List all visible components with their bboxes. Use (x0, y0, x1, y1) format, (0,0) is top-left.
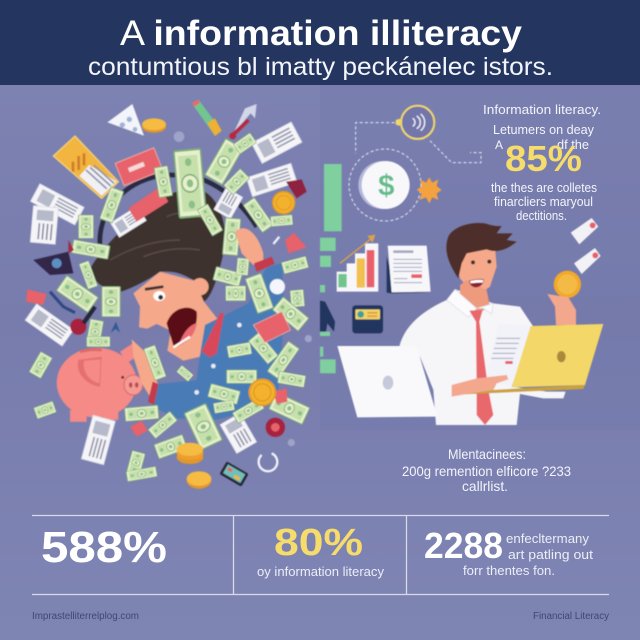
icon: signal ring (396, 106, 434, 139)
icon: orange star (417, 177, 442, 203)
paper in hand (487, 324, 531, 387)
text block: information literacy callout: finarcliers maryoul (494, 194, 593, 209)
title: A information illiteracy (120, 14, 523, 53)
stat: 2288: art patling out (508, 547, 593, 562)
icon: arrow tool (229, 104, 257, 139)
document: orange chart ticket (53, 136, 118, 198)
icon: dollar coin (349, 149, 421, 221)
text block: information literacy callout: 85% (505, 138, 582, 179)
icon: party hat top (107, 104, 144, 136)
header band (0, 0, 640, 85)
stat: 80%: 80% (274, 522, 363, 564)
hand with coin (547, 294, 576, 325)
face (133, 272, 218, 361)
stat: 588%: 588% (41, 523, 167, 572)
footer source: Imprastelliterrelplog.com (32, 611, 139, 622)
stat: 80%: oy information literacy (257, 564, 384, 579)
collar (447, 289, 493, 317)
black ring behind head (100, 175, 257, 247)
footer label: Financial Literacy (533, 611, 609, 622)
text block: maintenance note: callrlist. (462, 478, 508, 494)
text block: information literacy callout (483, 102, 601, 223)
shirt and arms (150, 263, 283, 420)
text block: information literacy callout: Information literacy. (483, 102, 601, 117)
text block: maintenance note: 200g remention elficore ?233 (402, 463, 571, 479)
coins (177, 192, 295, 489)
text block: maintenance note (402, 446, 571, 494)
panel: left illustration, overwhelmed man (25, 99, 312, 489)
typing hand (452, 375, 508, 397)
stat: 80% (257, 522, 384, 579)
text block: information literacy callout: the thes are colletes (491, 180, 597, 195)
stats frame (32, 515, 609, 595)
mouth (167, 308, 197, 347)
text block: information literacy callout: A (495, 138, 503, 152)
man hair (446, 223, 517, 278)
stat: 2288: 2288 (424, 525, 503, 566)
man face (455, 247, 497, 294)
receipts (25, 122, 302, 465)
subtitle: contumtious bl imatty peckánelec istors. (88, 53, 553, 81)
man shirt (399, 289, 566, 425)
hair (89, 189, 225, 302)
money bills (29, 133, 310, 482)
icon: bar chart (337, 235, 378, 292)
hand on piggy (132, 339, 158, 397)
icon: gold coin (554, 271, 581, 298)
stat: 2288 (424, 525, 593, 578)
icons: tickets (571, 218, 601, 274)
green bars (320, 164, 342, 373)
tie (469, 310, 493, 425)
raised fist and cuff (235, 228, 275, 272)
icon: coin top (142, 118, 166, 133)
panel: right illustration (320, 106, 603, 425)
icon: dollar coin: $ (378, 169, 394, 202)
icon: phone (219, 461, 249, 487)
document: red card top (115, 148, 163, 186)
icon: pencil (192, 99, 222, 136)
text block: maintenance note: Mlentacinees: (448, 446, 526, 462)
icon: document (387, 246, 431, 293)
white laptop (337, 346, 437, 417)
dashed connectors (356, 123, 481, 163)
text block: information literacy callout: Letumers on deay (493, 122, 594, 137)
text block: information literacy callout: df the (557, 137, 589, 152)
yellow laptop (460, 324, 603, 394)
text block: information literacy callout: dectitions. (516, 208, 567, 223)
stat: 2288: enfecltermany (506, 531, 590, 546)
small icons and cards (26, 179, 312, 446)
stat: 2288: forr thentes fon. (463, 563, 555, 578)
piggy bank (57, 344, 143, 422)
icon: refresh circle (259, 453, 277, 471)
icon: wallet (352, 305, 383, 333)
